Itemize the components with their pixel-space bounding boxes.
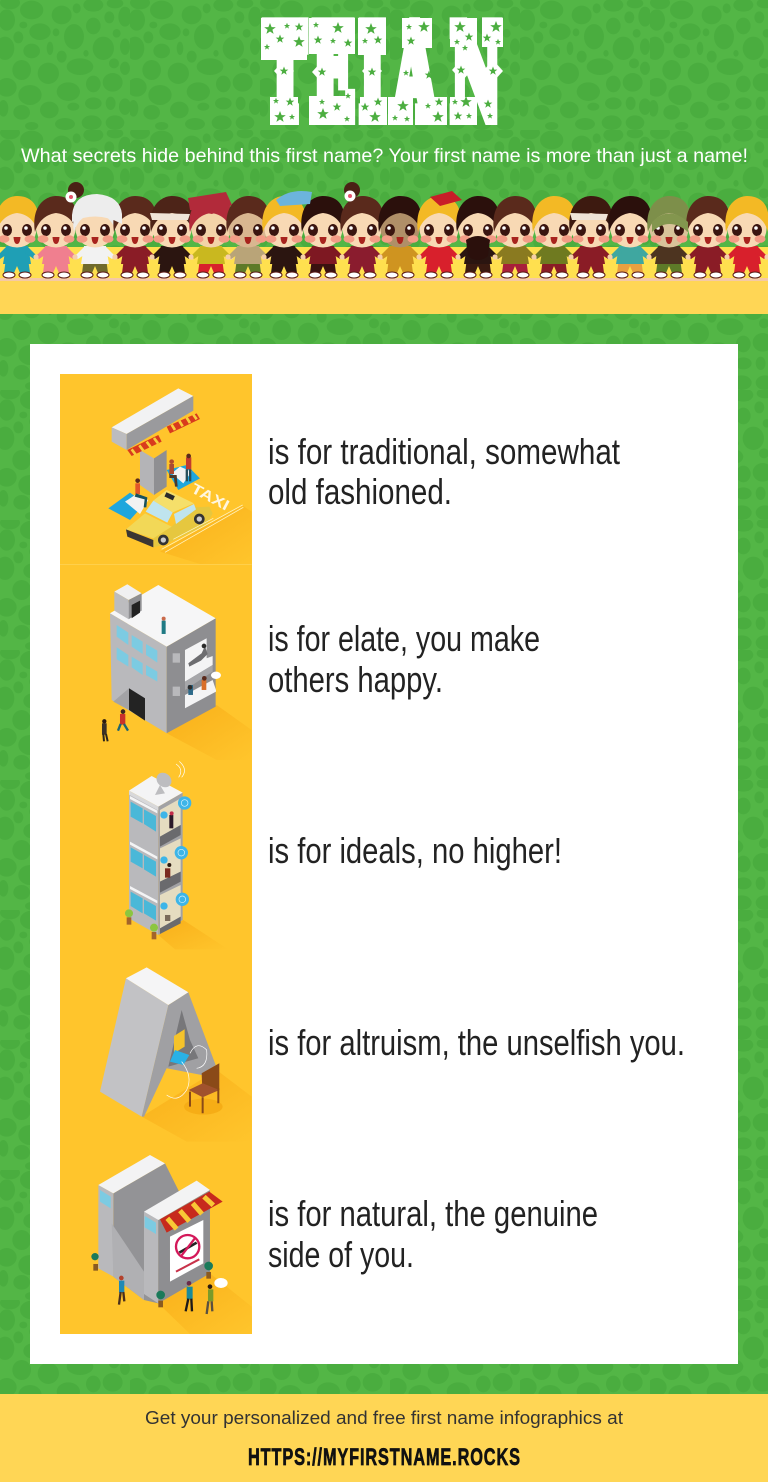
text: letter E: is for elate, you make (268, 618, 540, 659)
illustration: letter I tower (125, 761, 228, 949)
panel: white content card (30, 344, 738, 1364)
text: letter A: is for altruism, the unselfish you. (268, 1022, 685, 1063)
illustration: letter E building (102, 584, 252, 760)
footer url: HTTPS://MYFIRSTNAME.ROCKS (248, 1444, 520, 1471)
illustration: letter T taxi stand (60, 388, 252, 565)
text: letter T (268, 431, 620, 512)
text: letter N: side of you. (268, 1234, 414, 1275)
footer band (0, 1394, 768, 1482)
banner: parade of children in costumes (0, 182, 768, 314)
text: letter N (268, 1193, 598, 1275)
text: letter N: is for natural, the genuine (268, 1193, 598, 1234)
text: letter I: is for ideals, no higher! (268, 830, 562, 871)
subtitle: What secrets hide behind this first name? Your first name is more than just a name! (21, 145, 748, 167)
footer text: Get your personalized and free first name infographics at (145, 1408, 623, 1428)
text: letter T: is for traditional, somewhat (268, 431, 620, 472)
text: letter E: others happy. (268, 659, 443, 700)
text: letter E (268, 618, 540, 700)
illustration: letter A with chair (100, 967, 252, 1142)
panel: yellow illustration column (60, 374, 252, 1334)
illustration: letter T taxi stand: TAXI (188, 481, 232, 514)
text: letter T: old fashioned. (268, 471, 452, 512)
illustration: letter N with no smoking sign (91, 1155, 252, 1334)
title: TEIAN (264, 0, 502, 149)
